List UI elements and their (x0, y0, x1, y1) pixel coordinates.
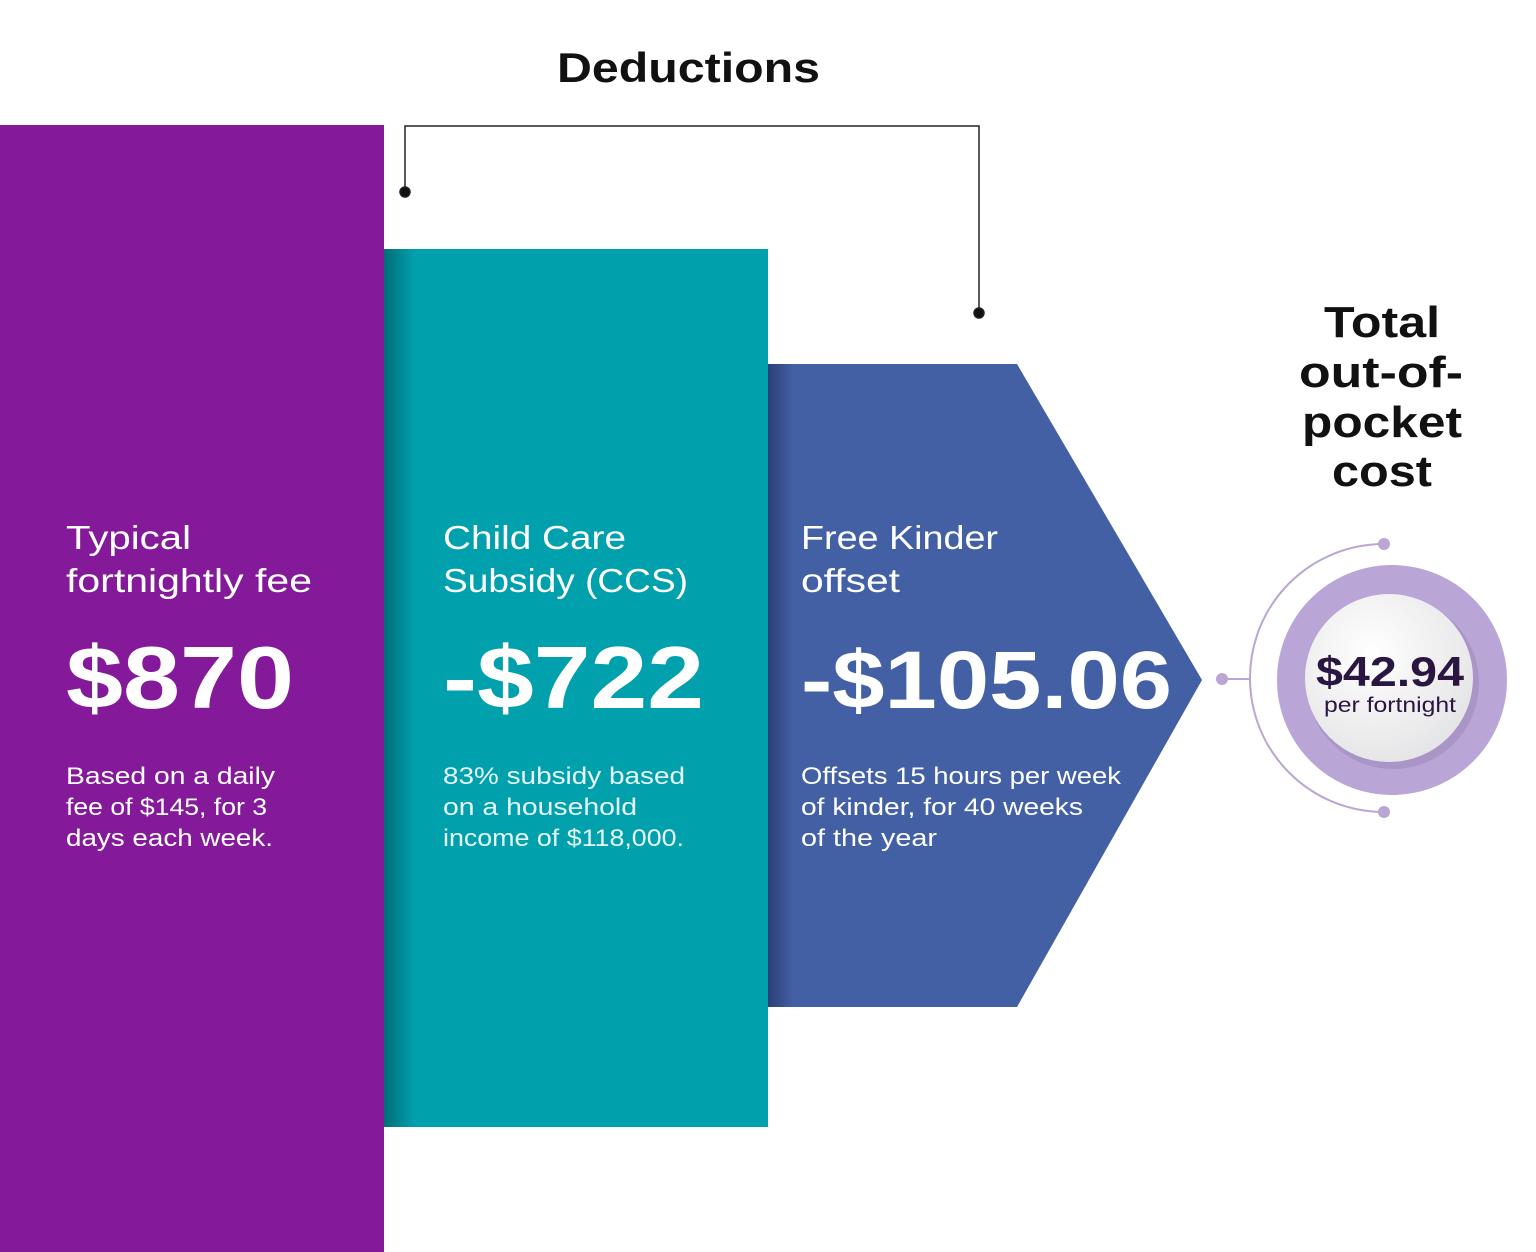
bracket (400, 126, 984, 318)
panel: CCS: -$722 (443, 628, 704, 727)
panel: CCS: on a household (443, 794, 637, 821)
panel: free kinder arrow: Offsets 15 hours per week (801, 763, 1122, 790)
panel: CCS: income of $118,000. (443, 825, 684, 852)
panel: CCS: Subsidy (CCS) (443, 562, 688, 599)
panel: CCS: Child Care (443, 519, 626, 556)
heading: total: out-of- (1299, 348, 1463, 397)
panel: typical fee: fortnightly fee (66, 562, 312, 599)
panel: free kinder arrow: Free Kinder (801, 519, 998, 556)
panel: typical fee (0, 125, 384, 1252)
connector arc (1216, 538, 1390, 818)
panel: CCS: 83% subsidy based (443, 763, 685, 790)
heading: total: cost (1332, 447, 1432, 496)
panel: CCS (384, 249, 768, 1127)
panel: typical fee: days each week. (66, 825, 273, 852)
panel: free kinder arrow: offset (801, 562, 900, 599)
panel: free kinder arrow: -$105.06 (801, 635, 1172, 726)
panel: typical fee: $870 (66, 628, 294, 727)
heading: total: Total (1324, 298, 1440, 347)
total circle: per fortnight (1324, 694, 1456, 717)
panel: typical fee: fee of $145, for 3 (66, 794, 267, 821)
panel: typical fee: Based on a daily (66, 763, 275, 790)
panel: free kinder arrow: of kinder, for 40 weeks (801, 794, 1083, 821)
panel: typical fee: Typical (66, 519, 191, 556)
heading: total: pocket (1302, 398, 1462, 447)
total circle (1277, 565, 1507, 795)
total circle: $42.94 (1316, 648, 1465, 695)
title: Deductions (557, 44, 820, 91)
panel: free kinder arrow (768, 364, 1202, 1007)
panel: free kinder arrow: of the year (801, 825, 937, 852)
